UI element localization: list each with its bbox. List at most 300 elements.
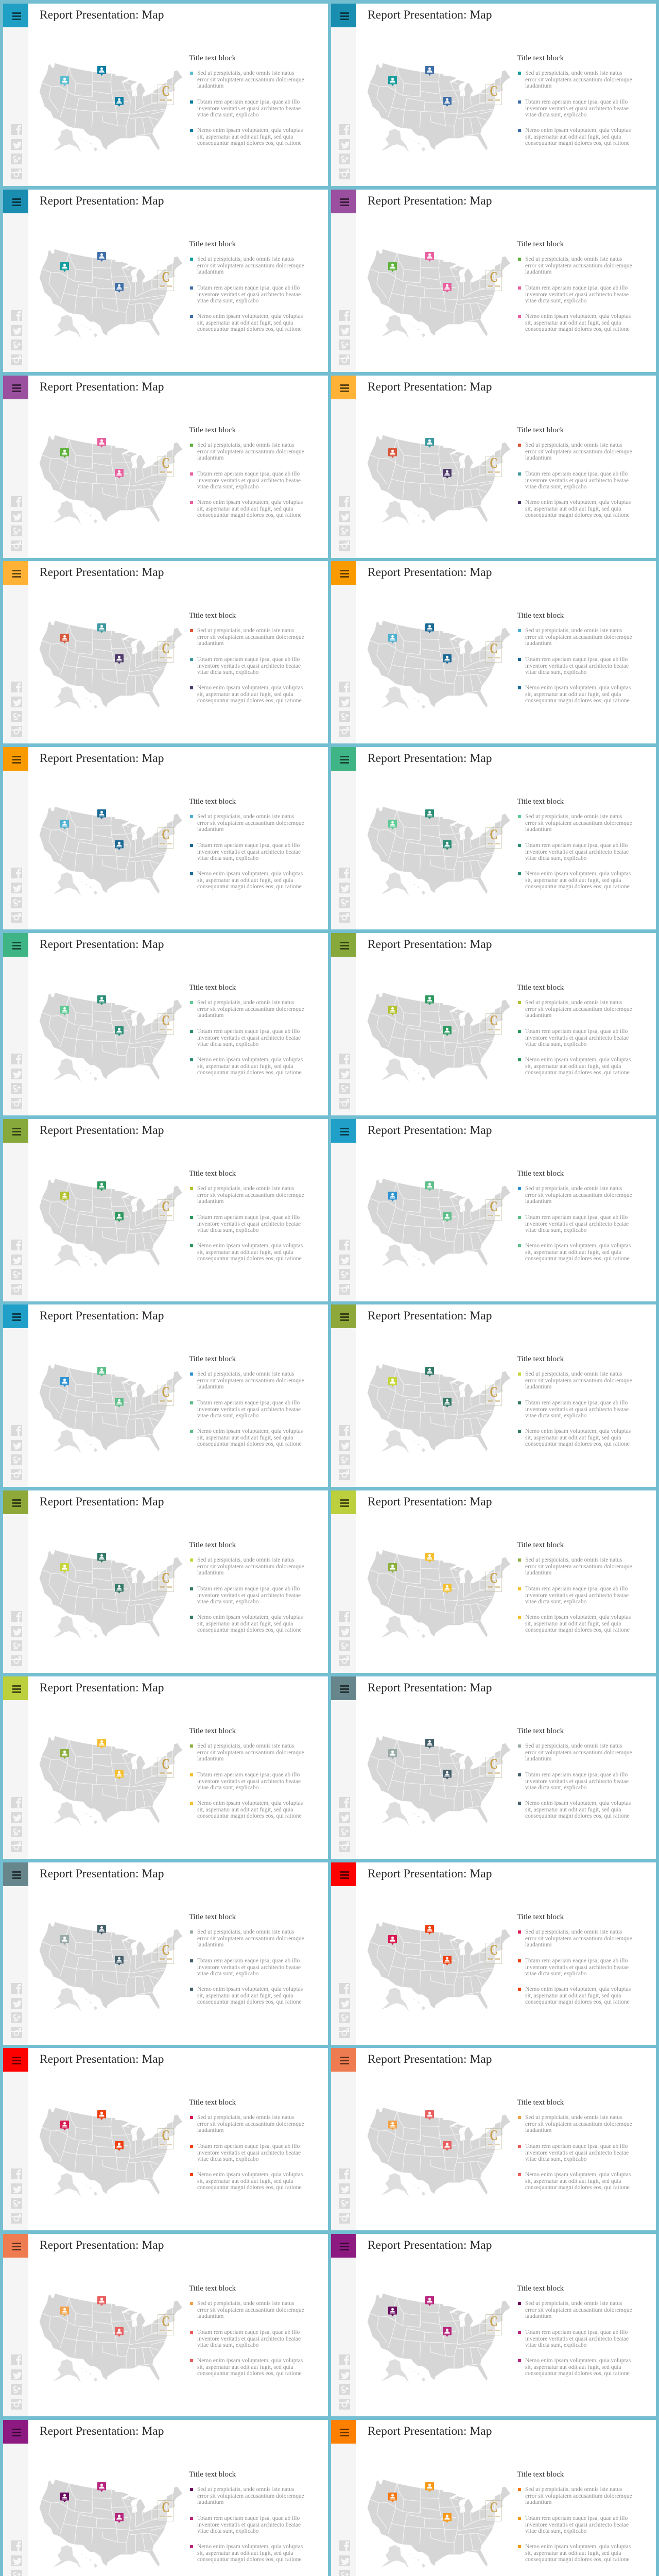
US map with three pins: [39, 620, 182, 710]
text block: inventore veritatis et quasi architecto beatae: [197, 478, 301, 484]
text block: consequuntur magni dolores eos, qui ratione: [197, 512, 302, 518]
title: Report Presentation: Map: [368, 566, 492, 579]
text block: laudantium: [197, 826, 223, 833]
text block: Nemo enim ipsam voluptatem, quia voluptas: [197, 2172, 303, 2178]
text block: error sit voluptatem accusantium doloremque: [197, 1936, 304, 1942]
panel: slide 18 (lime): [331, 1490, 656, 1673]
text block: Nemo enim ipsam voluptatem, quia voluptas: [525, 499, 631, 505]
watermark: [158, 1943, 174, 1964]
watermark: C: [162, 1199, 170, 1215]
text block: [189, 54, 304, 146]
watermark: C: [490, 455, 498, 471]
US map with three pins: [368, 1736, 511, 1825]
text block: inventore veritatis et quasi architecto beatae: [197, 1035, 301, 1041]
text block: [517, 612, 632, 704]
panel: slide 21 (slate): [3, 1862, 328, 2045]
US map with three pins: [362, 1918, 514, 2016]
menu tile: [3, 2048, 28, 2072]
US map with three pins: [368, 1364, 511, 1453]
text block: laudantium: [525, 1012, 551, 1019]
text block: error sit voluptatem accusantium doloremque: [525, 2121, 632, 2127]
text block: Sed ut perspiciatis, unde omnis iste natus: [525, 2114, 622, 2121]
US map with three pins: [368, 992, 511, 1082]
text block: Title text block: [189, 2470, 236, 2479]
panel: slide 1 (blue): [3, 4, 328, 186]
sidebar with social icons: [3, 399, 28, 558]
title: Report Presentation: Map: [40, 1124, 164, 1137]
text block: [189, 612, 304, 704]
panel: slide 28 (orange): [331, 2420, 656, 2576]
text block: [517, 1355, 632, 1447]
text block: vitae dicta sunt, explicabo: [197, 1599, 258, 1605]
text block: error sit voluptatem accusantium doloremque: [525, 2307, 632, 2313]
text block: sit, aspernatur aut odit aut fugit, sed quia: [197, 1249, 293, 1256]
text block: error sit voluptatem accusantium doloremque: [197, 2307, 304, 2313]
text block: vitae dicta sunt, explicabo: [197, 1971, 258, 1977]
text block: consequuntur magni dolores eos, qui ratione: [525, 326, 630, 332]
sidebar with social icons: [3, 27, 28, 186]
text block: sit, aspernatur aut odit aut fugit, sed quia: [525, 1435, 621, 1441]
text block: laudantium: [525, 2499, 551, 2505]
title: Report Presentation: Map: [40, 2053, 164, 2066]
text block: Nemo enim ipsam voluptatem, quia voluptas: [525, 871, 631, 877]
text block: [517, 2469, 652, 2567]
text block: Sed ut perspiciatis, unde omnis iste natus: [197, 1185, 294, 1192]
text block: vitae dicta sunt, explicabo: [197, 484, 258, 490]
text block: Sed ut perspiciatis, unde omnis iste natus: [525, 70, 622, 76]
text block: sit, aspernatur aut odit aut fugit, sed quia: [525, 691, 621, 698]
text block: [189, 240, 304, 332]
text block: vitae dicta sunt, explicabo: [197, 2342, 258, 2348]
US map with three pins: [362, 2104, 514, 2201]
text block: Sed ut perspiciatis, unde omnis iste natus: [525, 1185, 622, 1192]
text block: Title text block: [189, 54, 236, 62]
text block: Nemo enim ipsam voluptatem, quia voluptas: [525, 2544, 631, 2550]
panel: slide 7 (yellow): [3, 561, 328, 743]
text block: vitae dicta sunt, explicabo: [525, 669, 586, 675]
text block: sit, aspernatur aut odit aut fugit, sed quia: [525, 506, 621, 512]
text block: Title text block: [517, 798, 564, 806]
menu tile: [331, 2420, 356, 2444]
panel: slide 24 (coral): [331, 2048, 656, 2230]
text block: laudantium: [525, 269, 551, 275]
watermark: C: [162, 1756, 170, 1772]
watermark: C: [162, 641, 170, 657]
text block: error sit voluptatem accusantium doloremque: [197, 1378, 304, 1384]
text block: vitae dicta sunt, explicabo: [197, 112, 258, 118]
text block: error sit voluptatem accusantium doloremque: [197, 1006, 304, 1012]
text block: error sit voluptatem accusantium doloremque: [525, 1936, 632, 1942]
text block: sit, aspernatur aut odit aut fugit, sed quia: [525, 2178, 621, 2184]
menu tile: [3, 4, 28, 27]
US map with three pins: [362, 2476, 514, 2573]
text block: error sit voluptatem accusantium doloremque: [525, 1750, 632, 1756]
text block: error sit voluptatem accusantium doloremque: [525, 77, 632, 83]
sidebar with social icons: [331, 1886, 356, 2045]
text block: Nemo enim ipsam voluptatem, quia voluptas: [525, 2172, 631, 2178]
menu tile: [331, 561, 356, 585]
watermark: C: [490, 1013, 498, 1029]
panel: slide 19 (lime): [3, 1676, 328, 1859]
text block: sit, aspernatur aut odit aut fugit, sed quia: [197, 2550, 293, 2556]
text block: Sed ut perspiciatis, unde omnis iste natus: [197, 999, 294, 1006]
menu tile: [3, 376, 28, 399]
US map with three pins: [39, 63, 182, 152]
text block: [189, 2469, 324, 2567]
text block: sit, aspernatur aut odit aut fugit, sed quia: [525, 2364, 621, 2370]
US map with three pins: [39, 1736, 182, 1825]
text block: Title text block: [517, 54, 564, 62]
text block: laudantium: [197, 1756, 223, 1762]
watermark: [158, 2314, 174, 2335]
text block: Sed ut perspiciatis, unde omnis iste natus: [197, 2114, 294, 2121]
watermark: C: [490, 641, 498, 657]
text block: inventore veritatis et quasi architecto beatae: [525, 478, 629, 484]
text block: Sed ut perspiciatis, unde omnis iste natus: [525, 2300, 622, 2307]
title: Report Presentation: Map: [368, 1124, 492, 1137]
menu tile: [3, 561, 28, 585]
text block: [517, 1170, 632, 1262]
menu tile: [3, 2234, 28, 2258]
text block: inventore veritatis et quasi architecto beatae: [525, 2336, 629, 2342]
text block: Totam rem aperiam eaque ipsa, quae ab illo: [525, 285, 628, 291]
watermark: [158, 2128, 174, 2149]
text block: sit, aspernatur aut odit aut fugit, sed quia: [525, 2550, 621, 2556]
watermark: C: [490, 2500, 498, 2516]
text block: Sed ut perspiciatis, unde omnis iste natus: [525, 999, 622, 1006]
sidebar with social icons: [331, 585, 356, 743]
text block: Title text block: [517, 984, 564, 992]
text block: vitae dicta sunt, explicabo: [197, 855, 258, 861]
text block: Totam rem aperiam eaque ipsa, quae ab illo: [197, 1586, 300, 1592]
text block: Nemo enim ipsam voluptatem, quia voluptas: [197, 871, 303, 877]
panel: slide 23 (red): [3, 2048, 328, 2230]
text block: sit, aspernatur aut odit aut fugit, sed quia: [525, 1621, 621, 1627]
text block: laudantium: [197, 1012, 223, 1019]
text block: inventore veritatis et quasi architecto beatae: [197, 2522, 301, 2528]
menu tile: [3, 933, 28, 957]
text block: laudantium: [197, 640, 223, 647]
text block: Sed ut perspiciatis, unde omnis iste natus: [525, 1929, 622, 1935]
text block: error sit voluptatem accusantium doloremque: [197, 1564, 304, 1570]
text block: Nemo enim ipsam voluptatem, quia voluptas: [525, 2358, 631, 2364]
US map with three pins: [368, 63, 511, 152]
title: Report Presentation: Map: [368, 2239, 492, 2252]
watermark: [485, 1571, 502, 1592]
text block: error sit voluptatem accusantium doloremque: [197, 634, 304, 640]
text block: Title text block: [517, 1727, 564, 1735]
menu tile: [3, 1862, 28, 1886]
text block: error sit voluptatem accusantium doloremque: [525, 820, 632, 826]
text block: Totam rem aperiam eaque ipsa, quae ab illo: [197, 285, 300, 291]
text block: Title text block: [189, 984, 236, 992]
watermark: C: [162, 269, 170, 285]
text block: Totam rem aperiam eaque ipsa, quae ab illo: [525, 1028, 628, 1035]
sidebar with social icons: [3, 1886, 28, 2045]
text block: [189, 426, 304, 518]
text block: error sit voluptatem accusantium doloremque: [197, 1750, 304, 1756]
text block: Title text block: [189, 612, 236, 620]
text block: Sed ut perspiciatis, unde omnis iste natus: [525, 442, 622, 448]
text block: Nemo enim ipsam voluptatem, quia voluptas: [197, 1243, 303, 1249]
watermark: [158, 1013, 174, 1035]
sidebar with social icons: [3, 1700, 28, 1859]
watermark: C: [162, 1942, 170, 1958]
text block: Sed ut perspiciatis, unde omnis iste natus: [197, 1557, 294, 1563]
title: Report Presentation: Map: [368, 1495, 492, 1509]
title: Report Presentation: Map: [40, 194, 164, 208]
text block: Totam rem aperiam eaque ipsa, quae ab illo: [197, 1028, 300, 1035]
sidebar with social icons: [331, 399, 356, 558]
text block: consequuntur magni dolores eos, qui ratione: [197, 2184, 302, 2191]
watermark: C: [162, 83, 170, 99]
sidebar with social icons: [3, 2072, 28, 2230]
text block: sit, aspernatur aut odit aut fugit, sed quia: [197, 691, 293, 698]
panel: slide 12 (olive): [331, 933, 656, 1115]
text block: consequuntur magni dolores eos, qui ratione: [525, 2370, 630, 2377]
watermark: C: [162, 1384, 170, 1400]
text block: Totam rem aperiam eaque ipsa, quae ab illo: [197, 842, 300, 849]
text block: consequuntur magni dolores eos, qui ratione: [197, 698, 302, 704]
text block: Totam rem aperiam eaque ipsa, quae ab illo: [197, 99, 300, 105]
text block: laudantium: [525, 83, 551, 89]
text block: consequuntur magni dolores eos, qui ratione: [197, 2370, 302, 2377]
menu tile: [331, 2048, 356, 2072]
text block: sit, aspernatur aut odit aut fugit, sed quia: [197, 1807, 293, 1813]
text block: laudantium: [525, 1570, 551, 1576]
panel: slide 9 (amber): [3, 747, 328, 929]
text block: laudantium: [197, 2499, 223, 2505]
panel: slide 14 (bright blue): [331, 1119, 656, 1301]
US map with three pins: [368, 1550, 511, 1639]
watermark: [158, 84, 174, 105]
sidebar with social icons: [3, 585, 28, 743]
title: Report Presentation: Map: [40, 1867, 164, 1880]
text block: vitae dicta sunt, explicabo: [197, 1041, 258, 1047]
text block: sit, aspernatur aut odit aut fugit, sed quia: [525, 1063, 621, 1070]
text block: consequuntur magni dolores eos, qui ratione: [525, 140, 630, 146]
US map with three pins: [34, 2290, 186, 2387]
text block: Nemo enim ipsam voluptatem, quia voluptas: [525, 1243, 631, 1249]
text block: laudantium: [197, 83, 223, 89]
text block: sit, aspernatur aut odit aut fugit, sed quia: [197, 1063, 293, 1070]
watermark: [485, 270, 502, 291]
text block: [517, 240, 632, 332]
watermark: [485, 1199, 502, 1221]
watermark: C: [490, 1384, 498, 1400]
text block: error sit voluptatem accusantium doloremque: [197, 449, 304, 455]
watermark: [158, 2500, 174, 2521]
text block: Totam rem aperiam eaque ipsa, quae ab illo: [525, 1586, 628, 1592]
sidebar with social icons: [331, 213, 356, 372]
text block: consequuntur magni dolores eos, qui ratione: [197, 140, 302, 146]
watermark: [485, 1943, 502, 1964]
text block: Totam rem aperiam eaque ipsa, quae ab illo: [525, 1400, 628, 1406]
text block: vitae dicta sunt, explicabo: [525, 1785, 586, 1791]
text block: inventore veritatis et quasi architecto beatae: [525, 2150, 629, 2156]
text block: error sit voluptatem accusantium doloremque: [525, 1564, 632, 1570]
panel: slide 16 (moss): [331, 1304, 656, 1487]
text block: Nemo enim ipsam voluptatem, quia voluptas: [525, 313, 631, 319]
text block: Totam rem aperiam eaque ipsa, quae ab illo: [197, 2515, 300, 2521]
text block: sit, aspernatur aut odit aut fugit, sed quia: [197, 1435, 293, 1441]
text block: inventore veritatis et quasi architecto beatae: [525, 106, 629, 112]
text block: Totam rem aperiam eaque ipsa, quae ab illo: [525, 656, 628, 663]
text block: vitae dicta sunt, explicabo: [525, 298, 586, 304]
text block: inventore veritatis et quasi architecto beatae: [525, 1964, 629, 1971]
text block: Sed ut perspiciatis, unde omnis iste natus: [197, 1371, 294, 1377]
menu tile: [331, 1862, 356, 1886]
title: Report Presentation: Map: [40, 1495, 164, 1509]
text block: error sit voluptatem accusantium doloremque: [197, 263, 304, 269]
text block: inventore veritatis et quasi architecto beatae: [197, 1592, 301, 1599]
text block: sit, aspernatur aut odit aut fugit, sed quia: [197, 2178, 293, 2184]
watermark: C: [490, 1756, 498, 1772]
text block: vitae dicta sunt, explicabo: [197, 298, 258, 304]
watermark: C: [162, 827, 170, 843]
text block: sit, aspernatur aut odit aut fugit, sed quia: [197, 877, 293, 884]
text block: error sit voluptatem accusantium doloremque: [197, 1192, 304, 1198]
menu tile: [331, 1119, 356, 1143]
text block: vitae dicta sunt, explicabo: [525, 1971, 586, 1977]
panel: slide 15 (bright blue): [3, 1304, 328, 1487]
text block: consequuntur magni dolores eos, qui ratione: [525, 698, 630, 704]
text block: laudantium: [525, 1942, 551, 1948]
watermark: [158, 827, 174, 849]
US map with three pins: [39, 249, 182, 338]
text block: Totam rem aperiam eaque ipsa, quae ab illo: [525, 2515, 628, 2521]
text block: inventore veritatis et quasi architecto beatae: [197, 1221, 301, 1227]
text block: [517, 798, 632, 890]
text block: consequuntur magni dolores eos, qui ratione: [525, 2184, 630, 2191]
text block: Sed ut perspiciatis, unde omnis iste natus: [197, 70, 294, 76]
text block: vitae dicta sunt, explicabo: [197, 1413, 258, 1419]
sidebar with social icons: [331, 771, 356, 929]
watermark: [158, 1199, 174, 1221]
text block: laudantium: [197, 1570, 223, 1576]
panel: slide 2 (teal-blue): [331, 4, 656, 186]
text block: sit, aspernatur aut odit aut fugit, sed quia: [197, 2364, 293, 2370]
text block: inventore veritatis et quasi architecto beatae: [197, 106, 301, 112]
sidebar with social icons: [331, 2072, 356, 2230]
US map with three pins: [34, 2476, 186, 2573]
text block: vitae dicta sunt, explicabo: [525, 1227, 586, 1233]
title: Report Presentation: Map: [368, 2425, 492, 2438]
watermark: [485, 2500, 502, 2521]
text block: Sed ut perspiciatis, unde omnis iste natus: [197, 442, 294, 448]
text block: Nemo enim ipsam voluptatem, quia voluptas: [197, 2358, 303, 2364]
text block: vitae dicta sunt, explicabo: [525, 1041, 586, 1047]
text block: Sed ut perspiciatis, unde omnis iste natus: [197, 256, 294, 262]
menu tile: [3, 1304, 28, 1328]
text block: [189, 1355, 304, 1447]
text block: inventore veritatis et quasi architecto beatae: [197, 663, 301, 669]
text block: inventore veritatis et quasi architecto beatae: [197, 1406, 301, 1413]
text block: Nemo enim ipsam voluptatem, quia voluptas: [197, 127, 303, 133]
text block: Sed ut perspiciatis, unde omnis iste natus: [525, 256, 622, 262]
text block: Totam rem aperiam eaque ipsa, quae ab illo: [197, 1772, 300, 1778]
text block: consequuntur magni dolores eos, qui ratione: [525, 1441, 630, 1447]
US map with three pins: [34, 2104, 186, 2201]
text block: error sit voluptatem accusantium doloremque: [525, 2493, 632, 2499]
text block: inventore veritatis et quasi architecto beatae: [197, 292, 301, 298]
text block: vitae dicta sunt, explicabo: [197, 2156, 258, 2162]
text block: Sed ut perspiciatis, unde omnis iste natus: [525, 814, 622, 820]
text block: sit, aspernatur aut odit aut fugit, sed quia: [525, 134, 621, 140]
text block: Sed ut perspiciatis, unde omnis iste natus: [197, 628, 294, 634]
text block: Totam rem aperiam eaque ipsa, quae ab illo: [197, 1958, 300, 1964]
text block: Totam rem aperiam eaque ipsa, quae ab illo: [197, 2329, 300, 2335]
text block: vitae dicta sunt, explicabo: [197, 669, 258, 675]
text block: Title text block: [189, 2284, 236, 2293]
text block: consequuntur magni dolores eos, qui ratione: [525, 1999, 630, 2005]
text block: Title text block: [517, 1541, 564, 1549]
text block: Nemo enim ipsam voluptatem, quia voluptas: [197, 1428, 303, 1434]
text block: Totam rem aperiam eaque ipsa, quae ab illo: [197, 471, 300, 477]
text block: inventore veritatis et quasi architecto beatae: [525, 1221, 629, 1227]
text block: [517, 2283, 652, 2381]
title: Report Presentation: Map: [368, 194, 492, 208]
sidebar with social icons: [331, 957, 356, 1115]
text block: [517, 2097, 652, 2195]
title: Report Presentation: Map: [40, 1681, 164, 1694]
text block: sit, aspernatur aut odit aut fugit, sed quia: [525, 877, 621, 884]
menu tile: [331, 1304, 356, 1328]
text block: vitae dicta sunt, explicabo: [525, 1413, 586, 1419]
menu tile: [3, 190, 28, 213]
text block: consequuntur magni dolores eos, qui ratione: [197, 1441, 302, 1447]
text block: error sit voluptatem accusantium doloremque: [525, 449, 632, 455]
watermark: [485, 827, 502, 849]
text block: Totam rem aperiam eaque ipsa, quae ab illo: [525, 1214, 628, 1221]
title: Report Presentation: Map: [40, 938, 164, 951]
text block: error sit voluptatem accusantium doloremque: [197, 77, 304, 83]
US map with three pins: [39, 1550, 182, 1639]
text block: consequuntur magni dolores eos, qui ratione: [525, 1256, 630, 1262]
watermark: [485, 1757, 502, 1778]
text block: Totam rem aperiam eaque ipsa, quae ab illo: [525, 2143, 628, 2149]
text block: inventore veritatis et quasi architecto beatae: [525, 1592, 629, 1599]
watermark: C: [490, 1570, 498, 1586]
menu tile: [3, 1490, 28, 1514]
text block: Title text block: [517, 2098, 564, 2107]
menu tile: [3, 1676, 28, 1700]
US map with three pins: [39, 807, 182, 895]
text block: Sed ut perspiciatis, unde omnis iste natus: [197, 1929, 294, 1935]
sidebar with social icons: [331, 1700, 356, 1859]
menu tile: [331, 376, 356, 399]
text block: inventore veritatis et quasi architecto beatae: [197, 849, 301, 855]
text block: Sed ut perspiciatis, unde omnis iste natus: [197, 2486, 294, 2493]
text block: consequuntur magni dolores eos, qui ratione: [525, 1070, 630, 1076]
title: Report Presentation: Map: [40, 566, 164, 579]
sidebar with social icons: [3, 213, 28, 372]
text block: consequuntur magni dolores eos, qui ratione: [197, 1813, 302, 1819]
text block: inventore veritatis et quasi architecto beatae: [197, 1778, 301, 1785]
text block: sit, aspernatur aut odit aut fugit, sed quia: [525, 1993, 621, 1999]
text block: laudantium: [197, 455, 223, 461]
sidebar with social icons: [3, 771, 28, 929]
text block: consequuntur magni dolores eos, qui ratione: [197, 1999, 302, 2005]
text block: Totam rem aperiam eaque ipsa, quae ab illo: [197, 656, 300, 663]
menu tile: [331, 933, 356, 957]
text block: Title text block: [189, 240, 236, 248]
US map with three pins: [34, 1918, 186, 2016]
text block: Title text block: [517, 1355, 564, 1363]
watermark: [485, 1385, 502, 1406]
text block: laudantium: [525, 1756, 551, 1762]
title: Report Presentation: Map: [368, 1681, 492, 1694]
